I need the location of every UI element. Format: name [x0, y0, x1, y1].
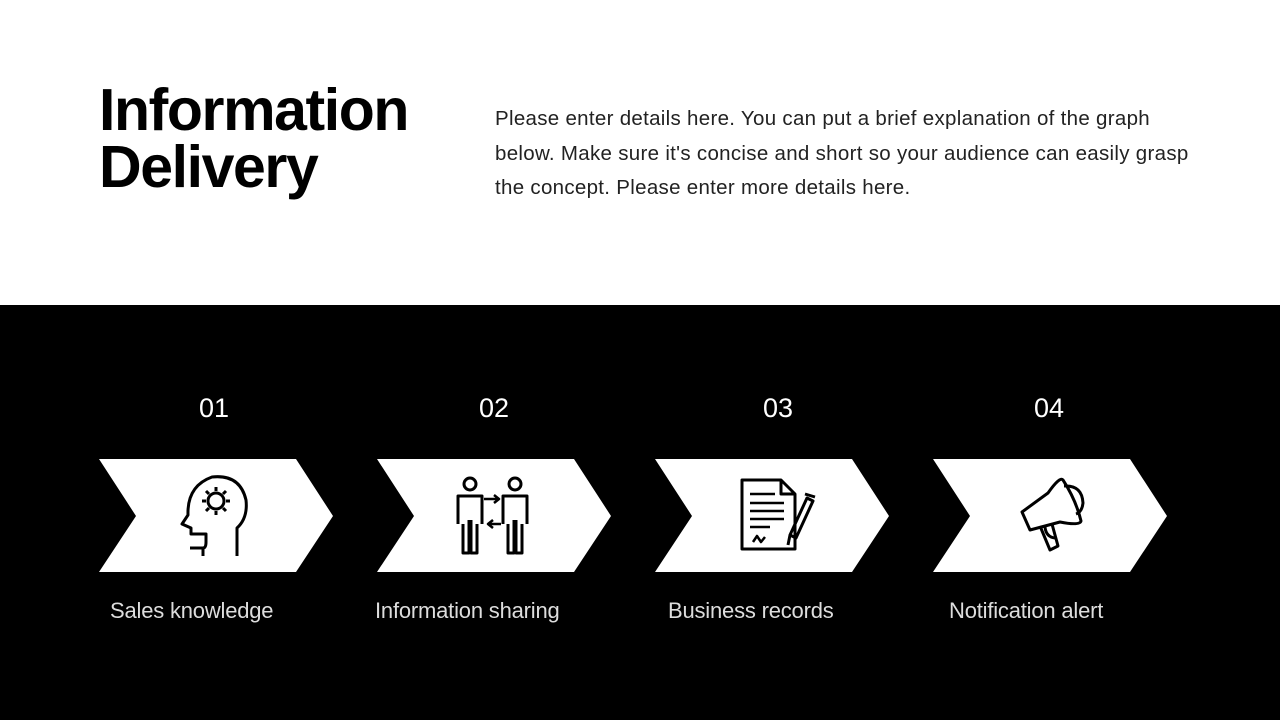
description text: Please enter details here. You can put a brief explanation of the graph below. Make sure it's concise and short so your audience can easily grasp the concept. Please enter more details here. [495, 107, 1189, 199]
icon: head with gear [182, 477, 246, 556]
label: Notification alert: Notification alert [949, 598, 1103, 623]
number 02: 02 [479, 393, 509, 423]
number 01: 01 [199, 393, 229, 423]
icon: document with pen [742, 480, 815, 549]
icon: megaphone [1022, 479, 1083, 550]
title [99, 77, 408, 200]
number 04: 04 [1034, 393, 1064, 423]
label: Business records: Business records [668, 598, 834, 623]
title: Information [99, 77, 408, 143]
label: Information sharing: Information sharing [375, 598, 560, 623]
chevron 4 [933, 459, 1167, 572]
chevron 3 [655, 459, 889, 572]
panel: black process band [0, 305, 1280, 720]
number 03: 03 [763, 393, 793, 423]
label: Sales knowledge: Sales knowledge [110, 598, 273, 623]
chevron 1 [99, 459, 333, 572]
icon: two people exchanging [458, 478, 527, 553]
title: Delivery [99, 134, 317, 200]
chevron 2 [377, 459, 611, 572]
